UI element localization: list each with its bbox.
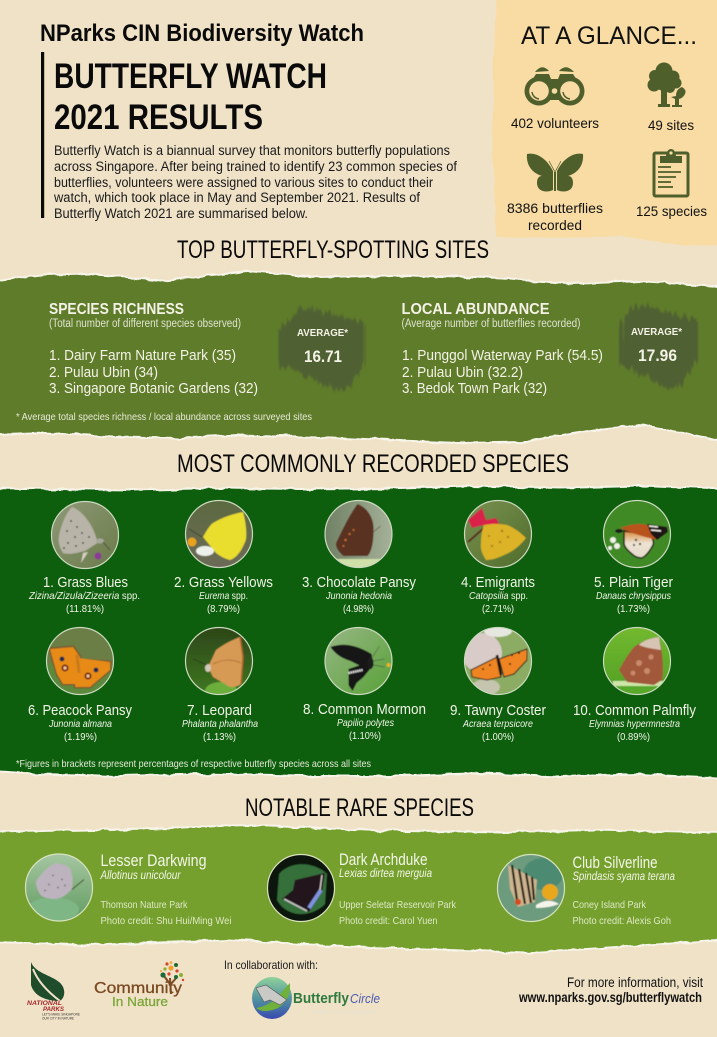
logo: national parks: PARKS xyxy=(43,1006,65,1013)
label: plain tiger xyxy=(594,574,673,615)
intro paragraph: watch, which took place in May and September 2021. Results of xyxy=(53,190,420,205)
text: lesser darkwing: Lesser Darkwing xyxy=(100,851,206,870)
label: common palmfly: Elymnias hypermnestra xyxy=(589,718,680,730)
text: dark archduke: Lexias dirtea merguia xyxy=(339,866,432,880)
logo: butterfly circle: Circle xyxy=(350,991,380,1006)
text: dark archduke: Photo credit: Carol Yuen xyxy=(339,915,438,927)
photo: emigrants xyxy=(462,498,534,570)
rare species: lesser darkwing xyxy=(23,851,232,927)
header: organiser line: NParks CIN Biodiversity Watch xyxy=(40,20,364,47)
text: club silverline: Photo credit: Alexis Goh xyxy=(572,915,671,927)
label: grass blues: Zizina/Zizula/Zizeeria spp. xyxy=(28,590,140,602)
photo: grass blues xyxy=(49,499,121,571)
species 3: chocolate pansy xyxy=(302,498,416,615)
panel: top butterfly-spotting sites xyxy=(0,270,717,444)
label: tawny coster: Acraea terpsicore xyxy=(462,718,533,730)
title: BUTTERFLY WATCH xyxy=(54,57,327,96)
label: chocolate pansy: 3. Chocolate Pansy xyxy=(302,574,416,591)
stat: sites: 49 sites xyxy=(648,117,694,133)
callout: species richness average: AVERAGE* xyxy=(297,327,349,339)
label: peacock pansy: (1.19%) xyxy=(64,731,97,743)
title xyxy=(54,57,327,137)
photo: tawny coster xyxy=(462,625,534,697)
sub-panel: local abundance: 3. Bedok Town Park (32) xyxy=(402,381,547,397)
logo: community in nature: Community xyxy=(94,980,182,997)
intro paragraph: Butterfly Watch is a biannual survey that monitors butterfly populations xyxy=(54,143,450,158)
label: leopard: 7. Leopard xyxy=(187,702,252,719)
species 8: common mormon xyxy=(303,625,426,742)
text: club silverline: Spindasis syama terana xyxy=(572,869,675,883)
intro paragraph xyxy=(53,143,457,221)
photo: dark archduke xyxy=(265,852,337,924)
accent bar xyxy=(41,52,44,218)
sub-panel: local abundance: LOCAL ABUNDANCE xyxy=(402,301,550,318)
species 1: grass blues xyxy=(28,499,140,615)
text: lesser darkwing: Thomson Nature Park xyxy=(100,899,188,911)
footnote: averages: * Average total species richness / local abundance across surveyed sites xyxy=(16,411,312,423)
text: club silverline: Coney Island Park xyxy=(572,899,647,911)
logo: national parks: NATIONAL xyxy=(27,1000,62,1007)
label: grass blues: 1. Grass Blues xyxy=(43,574,128,591)
photo: common palmfly xyxy=(601,625,673,697)
photo: lesser darkwing xyxy=(23,852,95,924)
sub-panel: species richness: 2. Pulau Ubin (34) xyxy=(49,365,158,381)
sub-panel: species richness: 1. Dairy Farm Nature Park (35) xyxy=(49,348,236,364)
heading: most commonly recorded species: MOST COMMONLY RECORDED SPECIES xyxy=(177,450,569,478)
photo: leopard xyxy=(184,626,254,696)
label: common mormon: (1.10%) xyxy=(349,730,381,742)
icon: binoculars xyxy=(524,67,584,106)
label: grass yellows: 2. Grass Yellows xyxy=(174,574,273,591)
logo: national parks xyxy=(27,962,81,1020)
sub-panel: local abundance xyxy=(402,301,603,397)
label: tawny coster: (1.00%) xyxy=(482,731,514,743)
species 4: emigrants xyxy=(461,498,535,615)
label: common palmfly: (0.89%) xyxy=(617,731,650,743)
sub-panel: local abundance: (Average number of butterflies recorded) xyxy=(402,318,581,330)
text: in collaboration with: In collaboration with: xyxy=(224,958,318,972)
rare species: club silverline xyxy=(495,852,675,927)
text: lesser darkwing: Photo credit: Shu Hui/Ming Wei xyxy=(100,915,232,927)
logo: butterfly circle: Butterfly xyxy=(293,990,350,1007)
logo: butterfly circle: a tribute to nature's flying jewels xyxy=(313,1010,378,1016)
label: emigrants: 4. Emigrants xyxy=(461,574,535,591)
label: common mormon: Papilio polytes xyxy=(337,717,395,729)
callout: species richness average xyxy=(282,306,364,391)
label: common palmfly xyxy=(573,702,696,743)
heading: notable rare species: NOTABLE RARE SPECIES xyxy=(245,794,474,822)
heading: top sites: TOP BUTTERFLY-SPOTTING SITES xyxy=(177,236,489,264)
icon: tree xyxy=(648,62,686,107)
label: plain tiger: Danaus chrysippus xyxy=(596,590,672,602)
label: peacock pansy: 6. Peacock Pansy xyxy=(28,702,132,719)
panel: notable rare species xyxy=(0,824,717,954)
stat: butterflies recorded: 8386 butterflies xyxy=(507,200,603,216)
panel: at a glance xyxy=(492,0,717,246)
label: common mormon: 8. Common Mormon xyxy=(303,701,426,718)
label: peacock pansy: Junonia almana xyxy=(48,718,112,730)
label: emigrants xyxy=(461,574,535,615)
label: leopard: Phalanta phalantha xyxy=(182,718,258,730)
icon: butterfly xyxy=(527,154,583,192)
callout: local abundance average xyxy=(620,304,697,391)
species 2: grass yellows xyxy=(174,498,273,615)
label: emigrants: (2.71%) xyxy=(482,603,514,615)
sub-panel: species richness: 3. Singapore Botanic Gardens (32) xyxy=(49,381,258,397)
callout: species richness average: 16.71 xyxy=(304,348,342,366)
rare species: dark archduke xyxy=(265,850,457,927)
label: plain tiger: 5. Plain Tiger xyxy=(594,574,673,591)
label: grass yellows: Eurema spp. xyxy=(199,590,248,602)
label: tawny coster: 9. Tawny Coster xyxy=(450,702,546,719)
text: club silverline: Club Silverline xyxy=(572,853,658,872)
text: lesser darkwing: Allotinus unicolour xyxy=(100,868,181,882)
label: chocolate pansy xyxy=(302,574,416,615)
photo: club silverline xyxy=(495,852,567,924)
species 7: leopard xyxy=(182,625,258,743)
label: emigrants: Catopsilia spp. xyxy=(469,590,528,602)
sub-panel: local abundance: 1. Punggol Waterway Park (54.5) xyxy=(402,348,603,364)
stat: butterflies recorded: recorded xyxy=(528,217,582,233)
species 5: plain tiger xyxy=(594,498,673,615)
logo: community in nature: In Nature xyxy=(112,994,168,1009)
title: 2021 RESULTS xyxy=(54,98,263,137)
stat: butterflies recorded xyxy=(507,200,603,233)
label: leopard xyxy=(182,702,258,743)
label: chocolate pansy: (4.98%) xyxy=(343,603,374,615)
stat: species: 125 species xyxy=(636,203,707,219)
species 9: tawny coster xyxy=(450,625,546,743)
heading: at a glance: AT A GLANCE... xyxy=(521,22,697,50)
sub-panel: species richness: (Total number of different species observed) xyxy=(49,318,241,330)
photo: chocolate pansy xyxy=(322,498,394,570)
label: grass yellows: (8.79%) xyxy=(207,603,240,615)
text: more information xyxy=(518,975,703,1005)
icon: clipboard xyxy=(654,149,688,196)
logo: community in nature xyxy=(94,961,184,1009)
label: chocolate pansy: Junonia hedonia xyxy=(325,590,392,602)
logo: butterfly circle xyxy=(252,977,380,1019)
text: club silverline xyxy=(572,853,675,927)
stat: volunteers: 402 volunteers xyxy=(511,115,599,131)
species 6: peacock pansy xyxy=(28,625,132,743)
panel: most commonly recorded species xyxy=(0,485,717,780)
intro paragraph: Butterfly Watch 2021 are summarised below. xyxy=(54,206,308,221)
label: grass blues xyxy=(28,574,140,615)
photo: peacock pansy xyxy=(44,625,116,697)
callout: local abundance average: 17.96 xyxy=(638,347,677,365)
text: dark archduke xyxy=(339,850,457,927)
intro paragraph: butterflies, volunteers were assigned to various sites to conduct their xyxy=(54,175,433,190)
intro paragraph: across Singapore. After being trained to identify 23 common species of xyxy=(54,159,457,174)
text: dark archduke: Upper Seletar Reservoir Park xyxy=(339,899,457,911)
footnote: percentages: *Figures in brackets represent percentages of respective butterfly species across all sites xyxy=(16,758,371,770)
photo: plain tiger xyxy=(601,498,673,570)
photo: common mormon xyxy=(322,625,394,697)
text: lesser darkwing xyxy=(100,851,232,927)
label: plain tiger: (1.73%) xyxy=(617,603,650,615)
logo: national parks: LET'S MAKE SINGAPORE xyxy=(42,1012,81,1016)
callout: local abundance average: AVERAGE* xyxy=(631,326,683,338)
sub-panel: species richness xyxy=(49,301,258,397)
label: common mormon xyxy=(303,701,426,742)
label: common palmfly: 10. Common Palmfly xyxy=(573,702,696,719)
sub-panel: local abundance: 2. Pulau Ubin (32.2) xyxy=(402,365,523,381)
logo: national parks: OUR CITY IN NATURE xyxy=(42,1016,75,1020)
label: grass blues: (11.81%) xyxy=(66,603,104,615)
label: tawny coster xyxy=(450,702,546,743)
species 10: common palmfly xyxy=(573,625,696,743)
label: peacock pansy xyxy=(28,702,132,743)
sub-panel: species richness: SPECIES RICHNESS xyxy=(49,301,184,318)
text: dark archduke: Dark Archduke xyxy=(339,850,428,869)
label: grass yellows xyxy=(174,574,273,615)
photo: grass yellows xyxy=(183,498,255,570)
label: leopard: (1.13%) xyxy=(203,731,236,743)
